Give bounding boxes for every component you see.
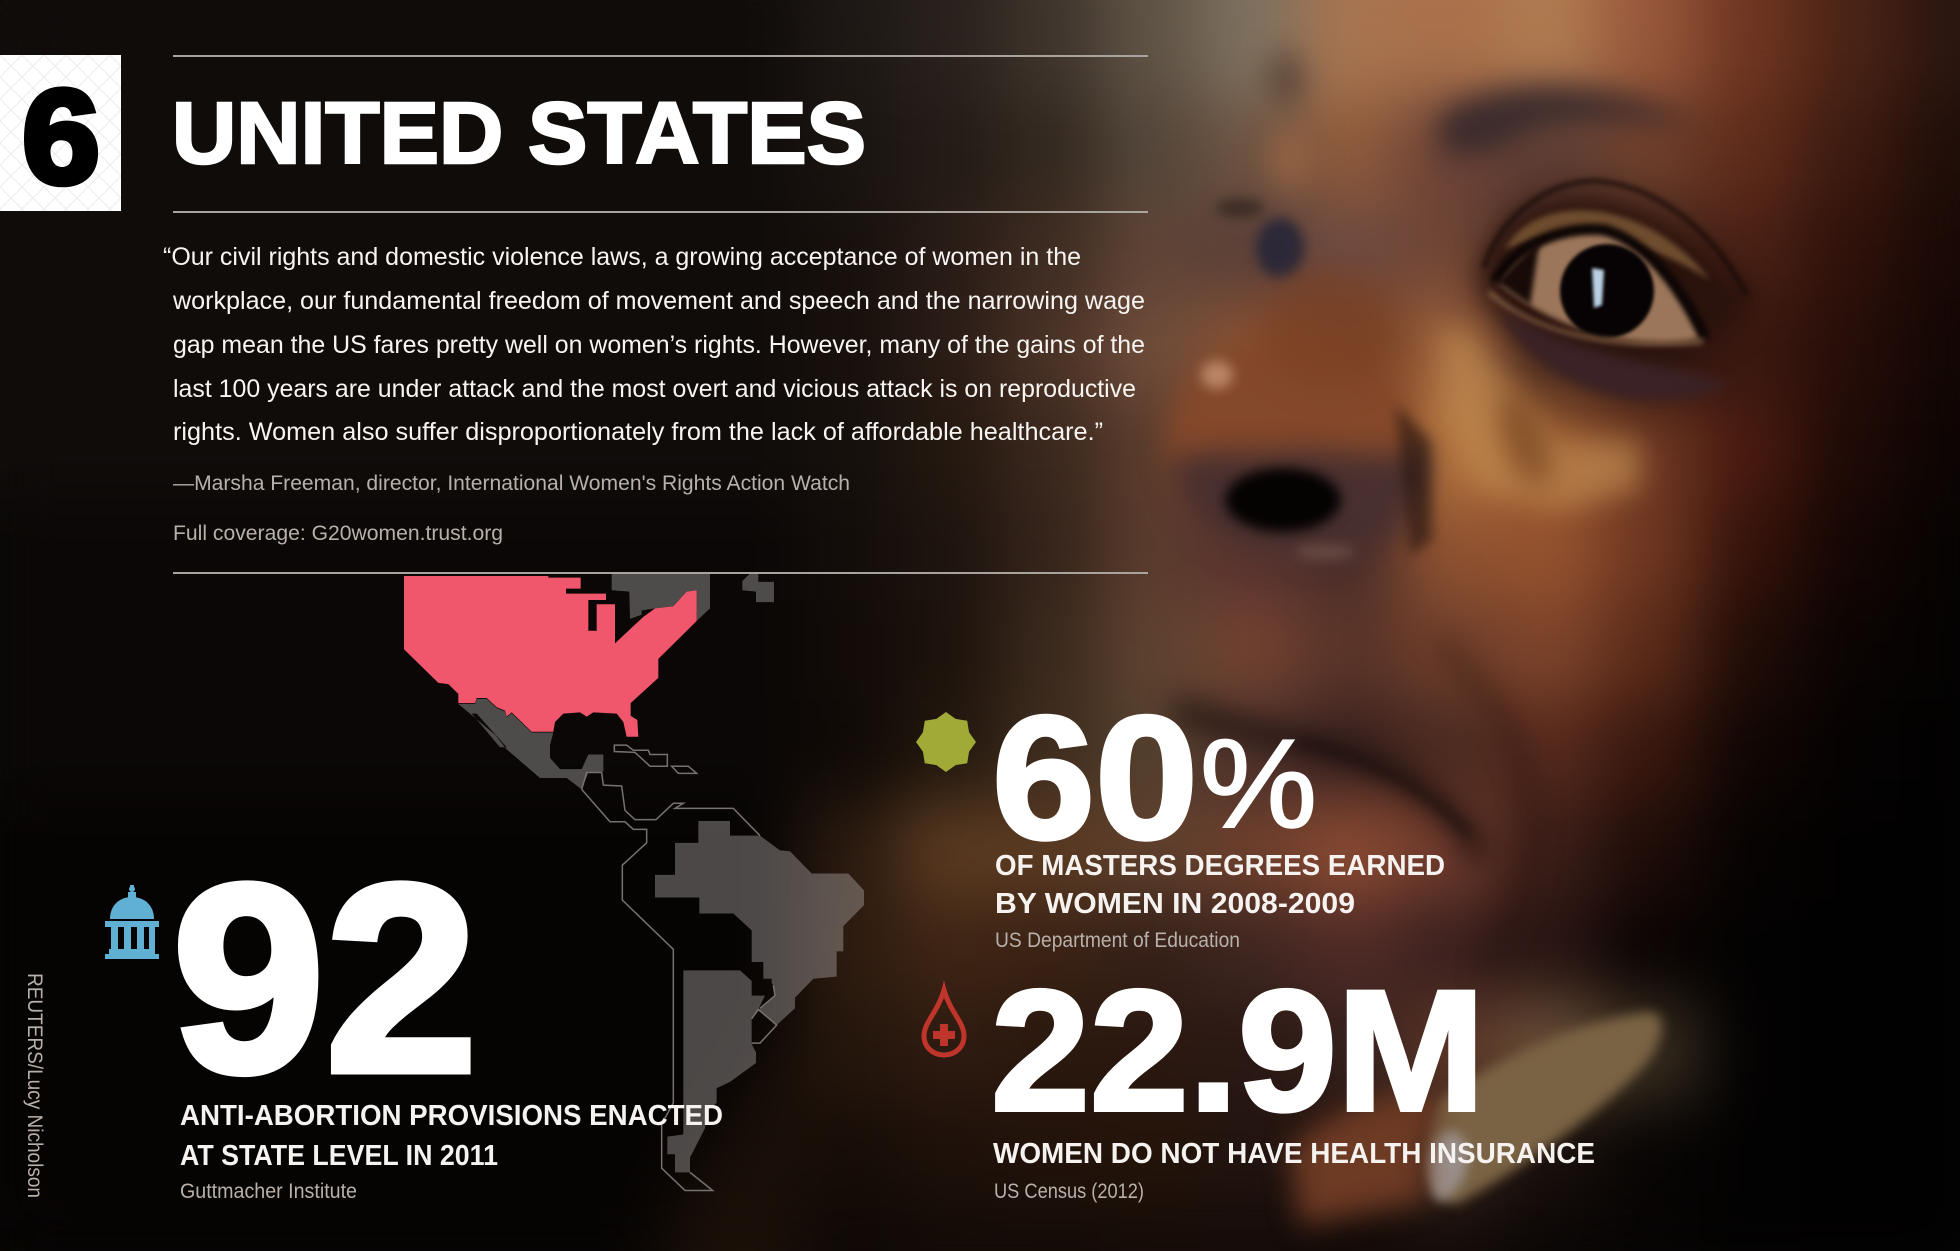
near eye — [1480, 197, 1760, 366]
quote: workplace, our fundamental freedom of movement and speech and the narrowing wage — [172, 287, 1145, 315]
usa highlighted — [404, 576, 697, 737]
stat: 60%: BY WOMEN IN 2008-2009 — [995, 888, 1355, 920]
map of the Americas — [404, 573, 864, 1190]
quote attribution: —Marsha Freeman, director, International Women's Rights Action Watch — [173, 472, 850, 495]
finger and nail — [1426, 1012, 1662, 1205]
stat: 92: ANTI-ABORTION PROVISIONS ENACTED — [180, 1100, 723, 1132]
stat: 92: AT STATE LEVEL IN 2011 — [180, 1140, 498, 1172]
stat: 60%: 60 — [992, 681, 1198, 876]
bright cheek — [1440, 325, 1640, 510]
stat: 22.9M — [991, 955, 1595, 1203]
stat: 22.9M: WOMEN DO NOT HAVE HEALTH INSURANCE — [993, 1138, 1595, 1170]
nose details — [1201, 361, 1233, 389]
stat: 60% — [992, 681, 1445, 952]
stat: 60%: % — [1200, 713, 1317, 854]
stat: 92 — [172, 828, 723, 1203]
country outlines — [582, 745, 777, 1190]
stat: 22.9M: US Census (2012) — [994, 1180, 1144, 1203]
canada — [612, 573, 774, 621]
stat: 92: Guttmacher Institute — [180, 1180, 357, 1203]
stat: 60%: US Department of Education — [995, 929, 1240, 952]
quote: last 100 years are under attack and the most overt and vicious attack is on reproductive — [173, 375, 1136, 403]
stat: 22.9M: 22.9M — [991, 955, 1485, 1147]
rank badge: 6 — [22, 63, 100, 212]
mexico — [458, 699, 603, 789]
quote — [163, 243, 1145, 446]
quote: gap mean the US fares pretty well on women’s rights. However, many of the gains of the — [173, 331, 1145, 359]
quote: “Our civil rights and domestic violence laws, a growing acceptance of women in the — [163, 243, 1081, 271]
stat: 60%: OF MASTERS DEGREES EARNED — [995, 850, 1445, 882]
mouth line — [1174, 708, 1482, 860]
rank badge — [0, 55, 121, 212]
argentina region — [667, 970, 765, 1172]
stat: 92: 92 — [172, 828, 478, 1128]
near brow — [1440, 87, 1700, 155]
photo credit: REUTERS/Lucy Nicholson — [23, 973, 46, 1198]
icon: blood drop — [924, 990, 964, 1055]
title: UNITED STATES — [172, 85, 866, 182]
nose body — [1168, 333, 1412, 557]
icon: capitol building — [105, 885, 159, 959]
icon: green badge — [916, 712, 976, 772]
full coverage link: Full coverage: G20women.trust.org — [173, 522, 503, 545]
quote: rights. Women also suffer disproportionately from the lack of affordable healthcare.” — [173, 418, 1103, 446]
far brow and far eye details — [1268, 50, 1304, 106]
nasolabial fold — [1440, 640, 1532, 975]
brazil region — [655, 821, 864, 1025]
